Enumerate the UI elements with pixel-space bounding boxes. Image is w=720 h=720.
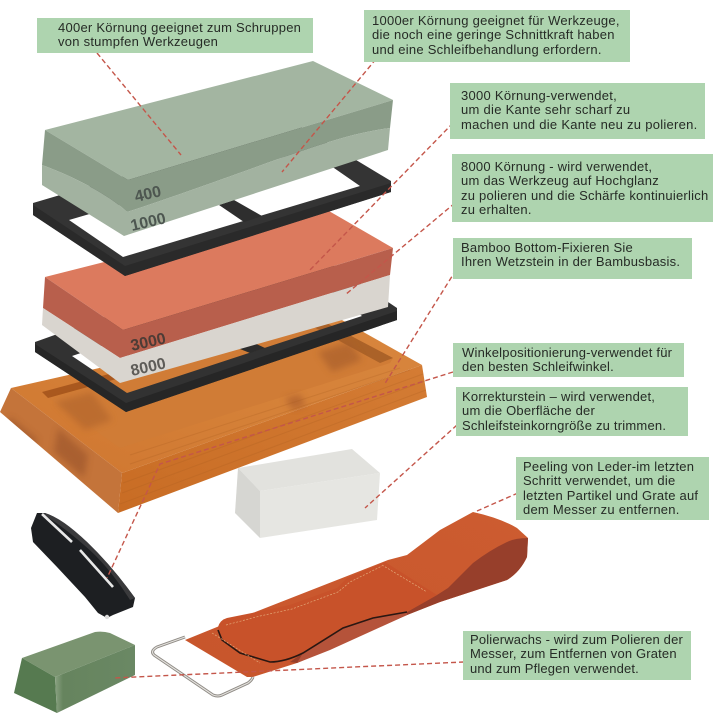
callout: 400 grit: 400er Körnung geeignet zum Schruppen <box>58 20 301 34</box>
callout: 3000 grit: um die Kante sehr scharf zu <box>461 102 630 117</box>
correction stone <box>235 449 380 538</box>
callout: polishing wax: und zum Pflegen verwendet. <box>470 660 639 676</box>
callout: leather strop: Schritt verwendet, um die <box>523 473 675 488</box>
callout: 1000 grit: 1000er Körnung geeignet für Werkzeuge, <box>372 12 620 28</box>
strop flap <box>218 562 437 662</box>
callout: 400 grit <box>37 18 313 53</box>
grit label 1000: 1000 <box>129 210 168 235</box>
callout: 8000 grit <box>452 154 713 222</box>
callout: 8000 grit: um das Werkzeug auf Hochglanz <box>461 173 659 188</box>
dashed leader lines <box>97 53 518 678</box>
callout: correction stone <box>456 387 688 436</box>
callout: 400 grit: von stumpfen Werkzeugen <box>58 34 218 49</box>
callout: correction stone: Korrekturstein – wird verwendet, <box>462 388 655 404</box>
callout: bamboo base <box>453 238 692 279</box>
callout: 3000 grit: 3000 Körnung-verwendet, <box>461 88 617 102</box>
callout: angle guide: den besten Schleifwinkel. <box>462 359 614 374</box>
callout: leather strop: dem Messer zu entfernen. <box>523 502 680 517</box>
callout: angle guide: Winkelpositionierung-verwendet für <box>462 344 672 360</box>
callout: leather strop: Peeling von Leder-im letzten <box>523 458 694 474</box>
callout: 8000 grit: zu polieren und die Schärfe kontinuierlich <box>461 188 708 202</box>
callout: 1000 grit: und eine Schleifbehandlung erfordern. <box>372 42 602 56</box>
green whetstone 400/1000 <box>42 61 393 236</box>
black rubber frame lower <box>35 246 397 412</box>
callout: polishing wax: Messer, zum Entfernen von Graten <box>470 646 677 661</box>
callout: 8000 grit: zu erhalten. <box>461 202 532 217</box>
callout: leather strop <box>516 457 709 520</box>
orange and white whetstone 3000/8000 <box>42 207 393 383</box>
callout: bamboo base: Bamboo Bottom-Fixieren Sie <box>461 240 633 254</box>
callout: correction stone: um die Oberfläche der <box>462 403 595 418</box>
callout: angle guide <box>453 343 684 377</box>
callout: 3000 grit: machen und die Kante neu zu polieren. <box>461 116 698 132</box>
callout: 8000 grit: 8000 Körnung - wird verwendet, <box>461 158 652 174</box>
black rubber frame upper <box>33 125 391 276</box>
callout: leather strop: letzten Partikel und Grate auf <box>523 488 698 502</box>
metal buckle <box>153 637 253 696</box>
angle guide <box>31 513 135 619</box>
leather strop <box>153 512 528 696</box>
grit label 400: 400 <box>133 183 163 206</box>
callout: polishing wax <box>463 631 691 680</box>
grit label 8000: 8000 <box>129 355 168 380</box>
grit label 3000: 3000 <box>129 330 168 355</box>
callout: 1000 grit: die noch eine geringe Schnittkraft haben <box>372 27 615 42</box>
polishing wax block <box>14 632 135 713</box>
callout: 3000 grit <box>450 83 705 139</box>
callout: polishing wax: Polierwachs - wird zum Polieren der <box>470 632 683 646</box>
callout: bamboo base: Ihren Wetzstein in der Bambusbasis. <box>461 254 680 269</box>
callout: correction stone: Schleifsteinkorngröße zu trimmen. <box>462 418 666 432</box>
wooden bamboo base <box>0 315 427 513</box>
callout: 1000 grit <box>364 10 630 62</box>
